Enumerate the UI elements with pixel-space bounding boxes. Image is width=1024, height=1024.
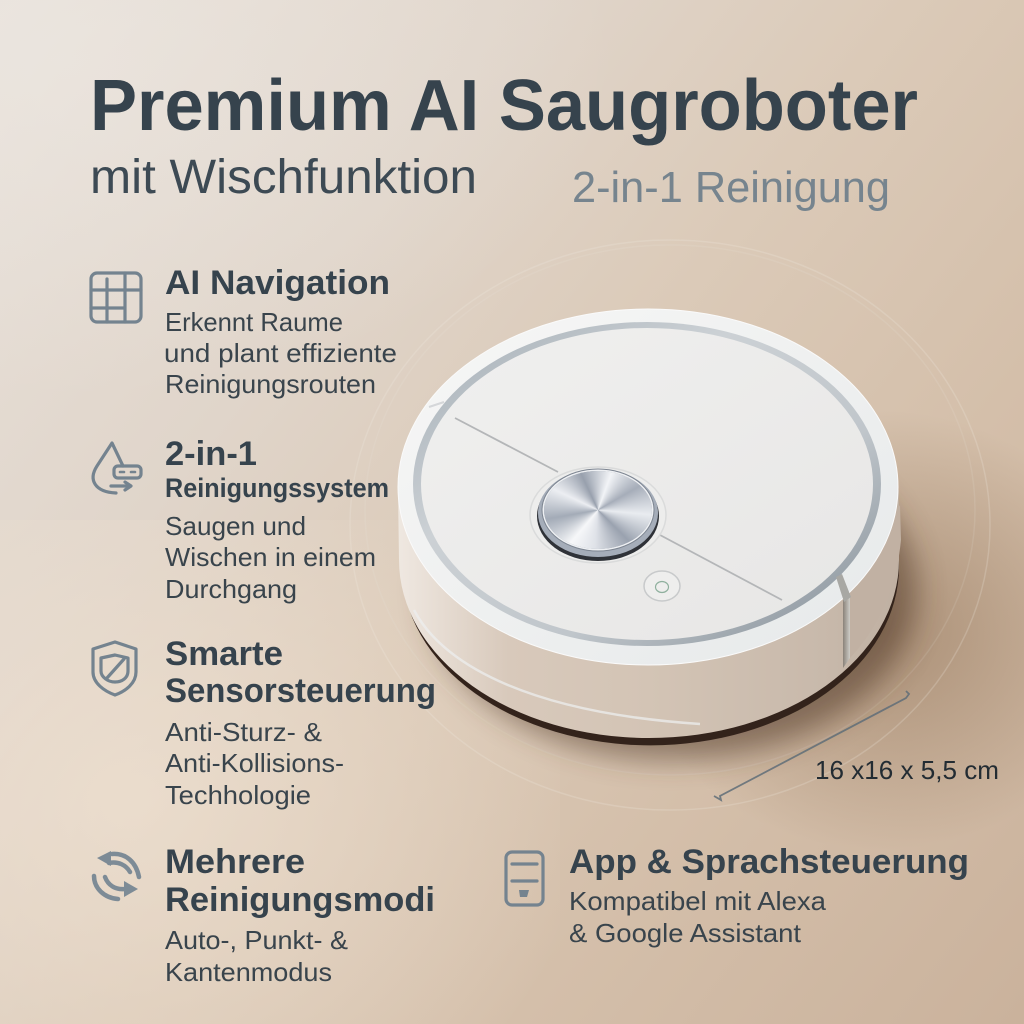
feature: sensors — [93, 635, 436, 810]
description — [165, 511, 376, 604]
icon: grid map — [91, 273, 141, 322]
description: & Google Assistant — [569, 918, 802, 948]
description — [164, 307, 397, 399]
feature: AI Navigation — [91, 264, 397, 399]
gap between bumper segments — [843, 595, 850, 668]
top plate — [421, 328, 873, 640]
dark base — [402, 520, 899, 745]
description: Kantenmodus — [165, 957, 332, 987]
background lower-left glow — [0, 520, 560, 1024]
description — [165, 925, 348, 987]
body groove — [414, 610, 700, 724]
heading: Mehrere — [165, 843, 305, 881]
feature: sensors: Sensorsteuerung — [165, 672, 436, 710]
heading: 2-in-1: 2-in-1 — [165, 435, 257, 473]
description: Erkennt Raume — [165, 307, 343, 337]
icon: shield — [93, 642, 136, 695]
central button recess — [530, 467, 666, 563]
tagline: 2-in-1 Reinigung — [572, 163, 890, 212]
feature: modes — [94, 843, 435, 987]
subtitle: mit Wischfunktion — [90, 151, 477, 204]
grey ring — [413, 322, 881, 646]
heading: Smarte — [165, 635, 283, 673]
dimension line — [714, 691, 909, 800]
description: Wischen in einem — [165, 542, 376, 572]
floor shadow — [427, 420, 917, 760]
subheading: Reinigungssystem — [165, 473, 389, 503]
icon: water drop — [93, 443, 141, 493]
feature: modes: Reinigungsmodi — [165, 881, 435, 919]
icon: app device — [506, 852, 543, 905]
power button — [644, 571, 680, 601]
rim slot — [836, 574, 851, 602]
description — [165, 717, 344, 810]
icon: cycle arrows — [94, 851, 139, 899]
right body segment — [846, 505, 901, 658]
description: Durchgang — [165, 574, 297, 604]
description — [569, 886, 827, 948]
body side — [398, 490, 899, 738]
seam left of rim — [429, 402, 444, 407]
description: Auto-, Punkt- & — [165, 925, 348, 955]
heading: App & Sprachsteuerung — [569, 843, 969, 881]
title: Premium AI Saugroboter — [90, 66, 918, 146]
dimension label: 16 x16 x 5,5 cm — [815, 755, 999, 785]
description: Techhologie — [165, 780, 311, 810]
feature: 2-in-1 — [93, 435, 389, 604]
heading: AI Navigation: AI Navigation — [165, 264, 390, 302]
description: Anti-Kollisions- — [165, 748, 344, 778]
faint orbit arcs — [350, 240, 990, 810]
description: Kompatibel mit Alexa — [569, 886, 827, 916]
metal disc — [544, 471, 652, 549]
description: Saugen und — [165, 511, 306, 541]
top rim — [398, 309, 898, 665]
description: Reinigungsrouten — [165, 369, 376, 399]
feature: app — [506, 843, 969, 948]
description: und plant effiziente — [164, 338, 397, 368]
plate division lines — [455, 418, 782, 600]
description: Anti-Sturz- & — [165, 717, 322, 747]
